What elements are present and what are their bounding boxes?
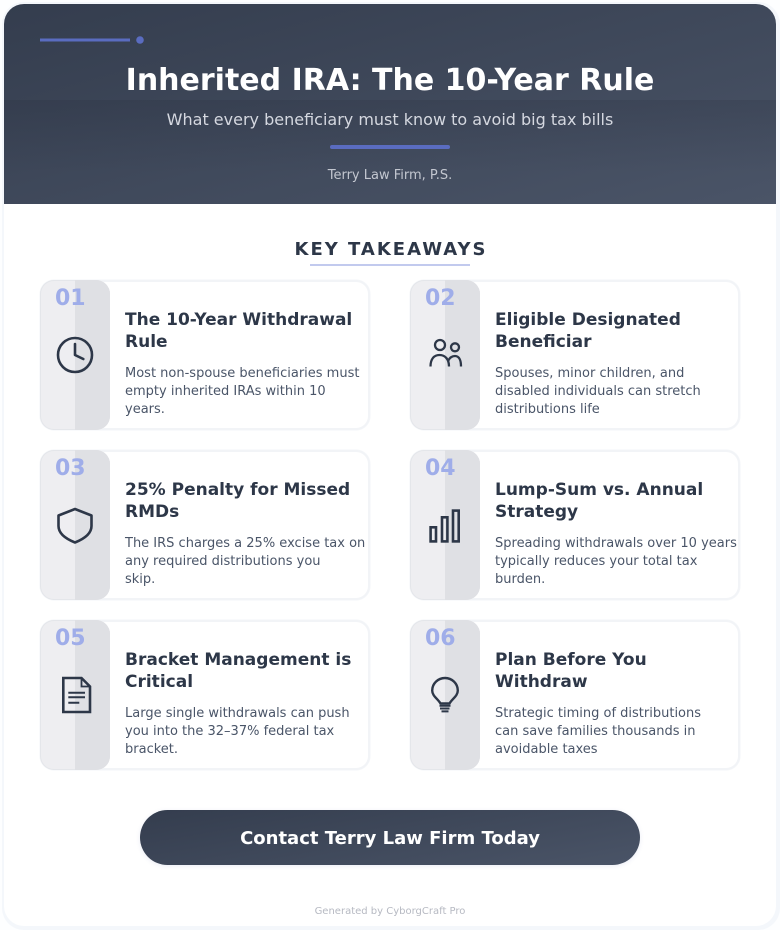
card 02 description: disabled individuals can stretch	[495, 384, 701, 399]
card 01 title: Rule	[125, 332, 168, 352]
card 06 side tab	[410, 620, 480, 770]
card 06	[410, 620, 740, 770]
card 02 side tab	[410, 280, 480, 430]
card 04 description: burden.	[495, 572, 545, 587]
header banner	[4, 4, 776, 204]
card 02 title: Eligible Designated	[495, 310, 681, 330]
card 05 description: you into the 32–37% federal tax	[125, 724, 334, 739]
card 03 title: RMDs	[125, 502, 179, 522]
card 04 description: Spreading withdrawals over 10 years	[495, 536, 737, 551]
card 01 description	[125, 366, 360, 417]
card 02	[410, 280, 740, 430]
section heading: key takeaways: KEY TAKEAWAYS	[294, 239, 487, 260]
number 05: 05	[55, 626, 86, 651]
icon: bar chart	[429, 509, 460, 543]
card 05 description	[125, 706, 350, 757]
card 05 title: Critical	[125, 672, 193, 692]
footer credit: Generated by CyborgCraft Pro	[315, 906, 465, 917]
card 02 title: Beneficiar	[495, 332, 591, 352]
card 03	[40, 450, 370, 600]
card 06 description: Strategic timing of distributions	[495, 706, 701, 721]
number 04: 04	[425, 456, 456, 481]
card 06 description: can save families thousands in	[495, 724, 696, 739]
card 05	[40, 620, 370, 770]
icon: shield	[57, 508, 93, 544]
card 01 description: empty inherited IRAs within 10	[125, 384, 326, 399]
icon: clock	[56, 336, 94, 374]
card 05 title	[125, 650, 351, 692]
card 01 description: years.	[125, 402, 165, 417]
card 03 title	[125, 480, 350, 522]
card 01 title	[125, 310, 352, 352]
icon: document	[62, 676, 92, 714]
card 04 title: Lump-Sum vs. Annual	[495, 480, 703, 500]
call to action button: Contact Terry Law Firm Today	[240, 828, 540, 849]
card 04	[410, 450, 740, 600]
number 02: 02	[425, 286, 456, 311]
card 04 side tab	[410, 450, 480, 600]
number 03: 03	[55, 456, 86, 481]
number 01: 01	[55, 286, 86, 311]
card 06 description: avoidable taxes	[495, 742, 598, 757]
card 02 description: distributions life	[495, 402, 600, 417]
subtitle: What every beneficiary must know to avoid big tax bills	[167, 110, 613, 129]
card 04 description	[495, 536, 737, 587]
icon: people	[429, 338, 462, 366]
number 06: 06	[425, 626, 456, 651]
card 02 title	[495, 310, 681, 352]
card 05 side tab	[40, 620, 110, 770]
card 05 description: Large single withdrawals can push	[125, 706, 350, 721]
card 03 side tab	[40, 450, 110, 600]
card 01	[40, 280, 370, 430]
card 03 description: The IRS charges a 25% excise tax on	[125, 536, 365, 551]
firm name: Terry Law Firm, P.S.	[328, 168, 452, 183]
card 05 title: Bracket Management is	[125, 650, 351, 670]
card 06 title	[495, 650, 647, 692]
card 04 title: Strategy	[495, 502, 578, 522]
card 05 description: bracket.	[125, 742, 178, 757]
title: Inherited IRA: The 10-Year Rule	[126, 63, 654, 98]
card 06 title: Withdraw	[495, 672, 588, 692]
card 02 description: Spouses, minor children, and	[495, 366, 684, 381]
icon: light bulb	[431, 676, 459, 712]
decorative accent line with dot	[40, 36, 144, 44]
card 01 side tab	[40, 280, 110, 430]
card 03 description: any required distributions you	[125, 554, 321, 569]
card 06 description	[495, 706, 701, 757]
subtitle divider	[330, 145, 450, 149]
call to action button	[140, 810, 640, 865]
card 02 description	[495, 366, 701, 417]
card 04 title	[495, 480, 703, 522]
heading underline	[310, 264, 470, 266]
card 06 title: Plan Before You	[495, 650, 647, 670]
card 01 description: Most non-spouse beneficiaries must	[125, 366, 359, 381]
card 04 description: typically reduces your total tax	[495, 554, 697, 569]
card 03 description	[124, 536, 365, 587]
card 01 title: The 10-Year Withdrawal	[125, 310, 352, 330]
card 03 description: skip.	[125, 572, 155, 587]
card 03 title: 25% Penalty for Missed	[125, 480, 350, 500]
